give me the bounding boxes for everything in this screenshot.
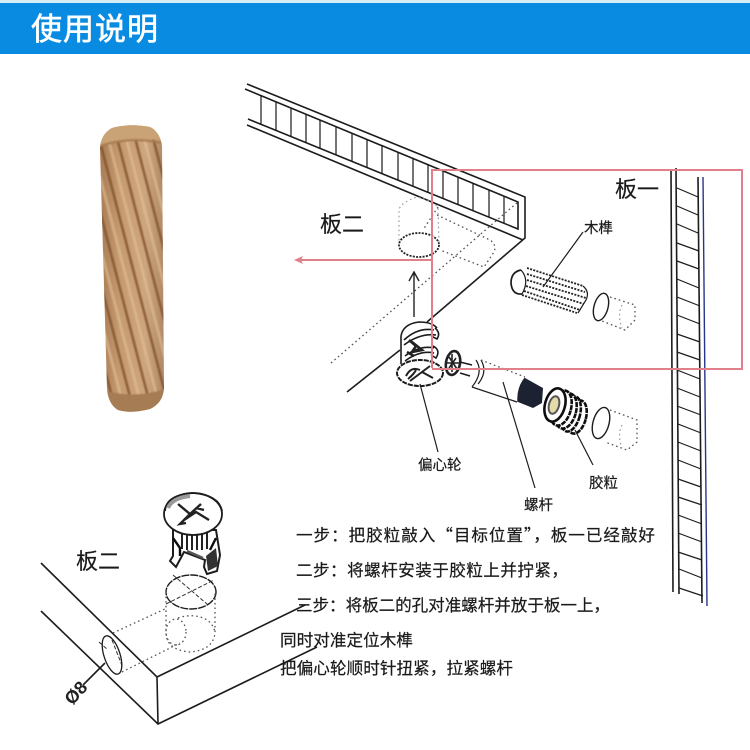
label: board one: 板一	[615, 177, 659, 202]
label: board two: 板二	[320, 212, 364, 237]
step one: 一步：把胶粒敲入“目标位置”，板一已经敲好	[296, 522, 655, 546]
diagram: wooden dowel part	[511, 268, 635, 330]
step two: 二步：将螺杆安装于胶粒上并拧紧，	[296, 557, 568, 581]
leader: dowel label	[543, 232, 583, 287]
leader: screw label	[503, 382, 535, 488]
label: board two lower: 板二	[76, 549, 120, 574]
leader: grain label	[575, 430, 593, 465]
step four: 把偏心轮顺时针扭紧，拉紧螺杆	[280, 655, 513, 679]
diagram: board one side view	[671, 168, 707, 606]
label: eccentric wheel: 偏心轮	[418, 457, 462, 474]
step three continued: 同时对准定位木榫	[280, 627, 413, 651]
diagram: lower board corner	[41, 563, 317, 724]
hole in board two	[399, 197, 495, 267]
label: screw: 螺杆	[524, 497, 553, 514]
header banner	[0, 0, 750, 54]
title: 使用说明	[31, 4, 159, 49]
arrow: upward	[409, 272, 419, 317]
label: diameter: Ø8	[61, 677, 91, 709]
diagram: eccentric wheel	[397, 322, 443, 386]
assembly steps	[280, 522, 655, 679]
photo: wooden dowel	[100, 125, 164, 412]
leader: wheel label	[420, 384, 438, 452]
label: glue grain: 胶粒	[589, 475, 618, 492]
diagram: eccentric wheel lower	[164, 493, 222, 574]
step three: 三步：将板二的孔对准螺杆并放于板一上，	[296, 592, 610, 616]
diagram: board two top view	[245, 84, 525, 392]
red highlight frame and arrow	[294, 170, 742, 369]
diagram: glue grain	[541, 386, 637, 450]
diagram: screw bolt	[444, 350, 543, 408]
label: dowel: 木榫	[584, 220, 613, 237]
